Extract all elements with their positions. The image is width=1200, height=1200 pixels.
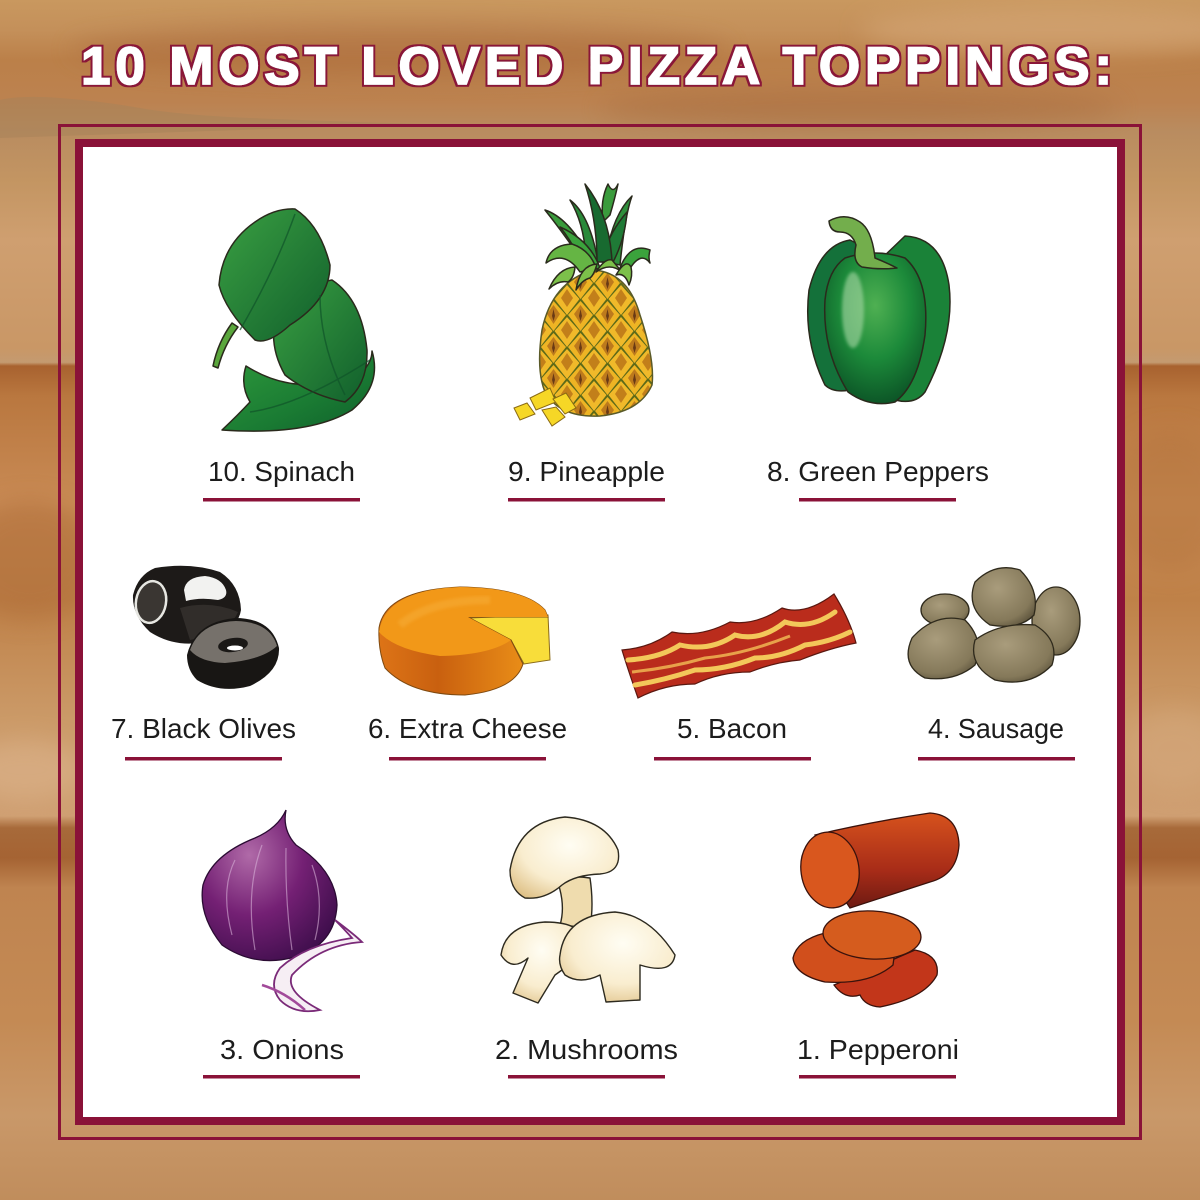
topping: green peppers — [767, 217, 989, 502]
icon: black olives — [133, 566, 279, 689]
icon: pineapple — [514, 184, 652, 426]
label: 6. Extra Cheese: 6. Extra Cheese — [368, 713, 567, 744]
topping: black olives — [111, 566, 296, 760]
topping: extra cheese — [368, 587, 567, 760]
icon: spinach leaves — [213, 209, 374, 431]
label: 2. Mushrooms: 2. Mushrooms — [495, 1034, 678, 1065]
icon: mushrooms — [501, 817, 675, 1003]
underline — [918, 757, 1075, 760]
topping: pepperoni — [793, 813, 959, 1078]
label: 10. Spinach: 10. Spinach — [208, 456, 355, 487]
topping: sausage — [908, 568, 1080, 760]
underline — [654, 757, 811, 760]
topping: mushrooms — [495, 817, 678, 1078]
icon: pepperoni — [793, 813, 959, 1007]
label: 1. Pepperoni: 1. Pepperoni — [797, 1034, 959, 1065]
underline — [203, 498, 360, 502]
underline — [389, 757, 546, 760]
icon: sausage crumbles — [908, 568, 1080, 682]
title: 10 MOST LOVED PIZZA TOPPINGS: — [81, 37, 1112, 96]
label: 9. Pineapple: 9. Pineapple — [508, 456, 665, 487]
underline — [508, 498, 665, 502]
icon: green pepper — [808, 217, 950, 404]
underline — [125, 757, 282, 760]
topping: pineapple — [508, 184, 665, 502]
topping: onions — [202, 810, 362, 1078]
underline — [799, 498, 956, 502]
label: 5. Bacon: 5. Bacon — [677, 713, 787, 744]
label: 7. Black Olives: 7. Black Olives — [111, 713, 296, 744]
label: 4. Sausage: 4. Sausage — [928, 713, 1064, 744]
icon: bacon — [622, 594, 856, 698]
label: 3. Onions: 3. Onions — [220, 1034, 344, 1065]
topping: spinach — [203, 209, 374, 501]
underline — [508, 1075, 665, 1078]
topping: bacon — [622, 594, 856, 760]
underline — [203, 1075, 360, 1078]
icon: cheese wheel — [379, 587, 550, 695]
underline — [799, 1075, 956, 1078]
label: 8. Green Peppers: 8. Green Peppers — [767, 456, 989, 487]
pineapple chunks — [514, 388, 576, 426]
frame and white panel — [60, 126, 1140, 1138]
icon: red onion — [202, 810, 362, 1011]
